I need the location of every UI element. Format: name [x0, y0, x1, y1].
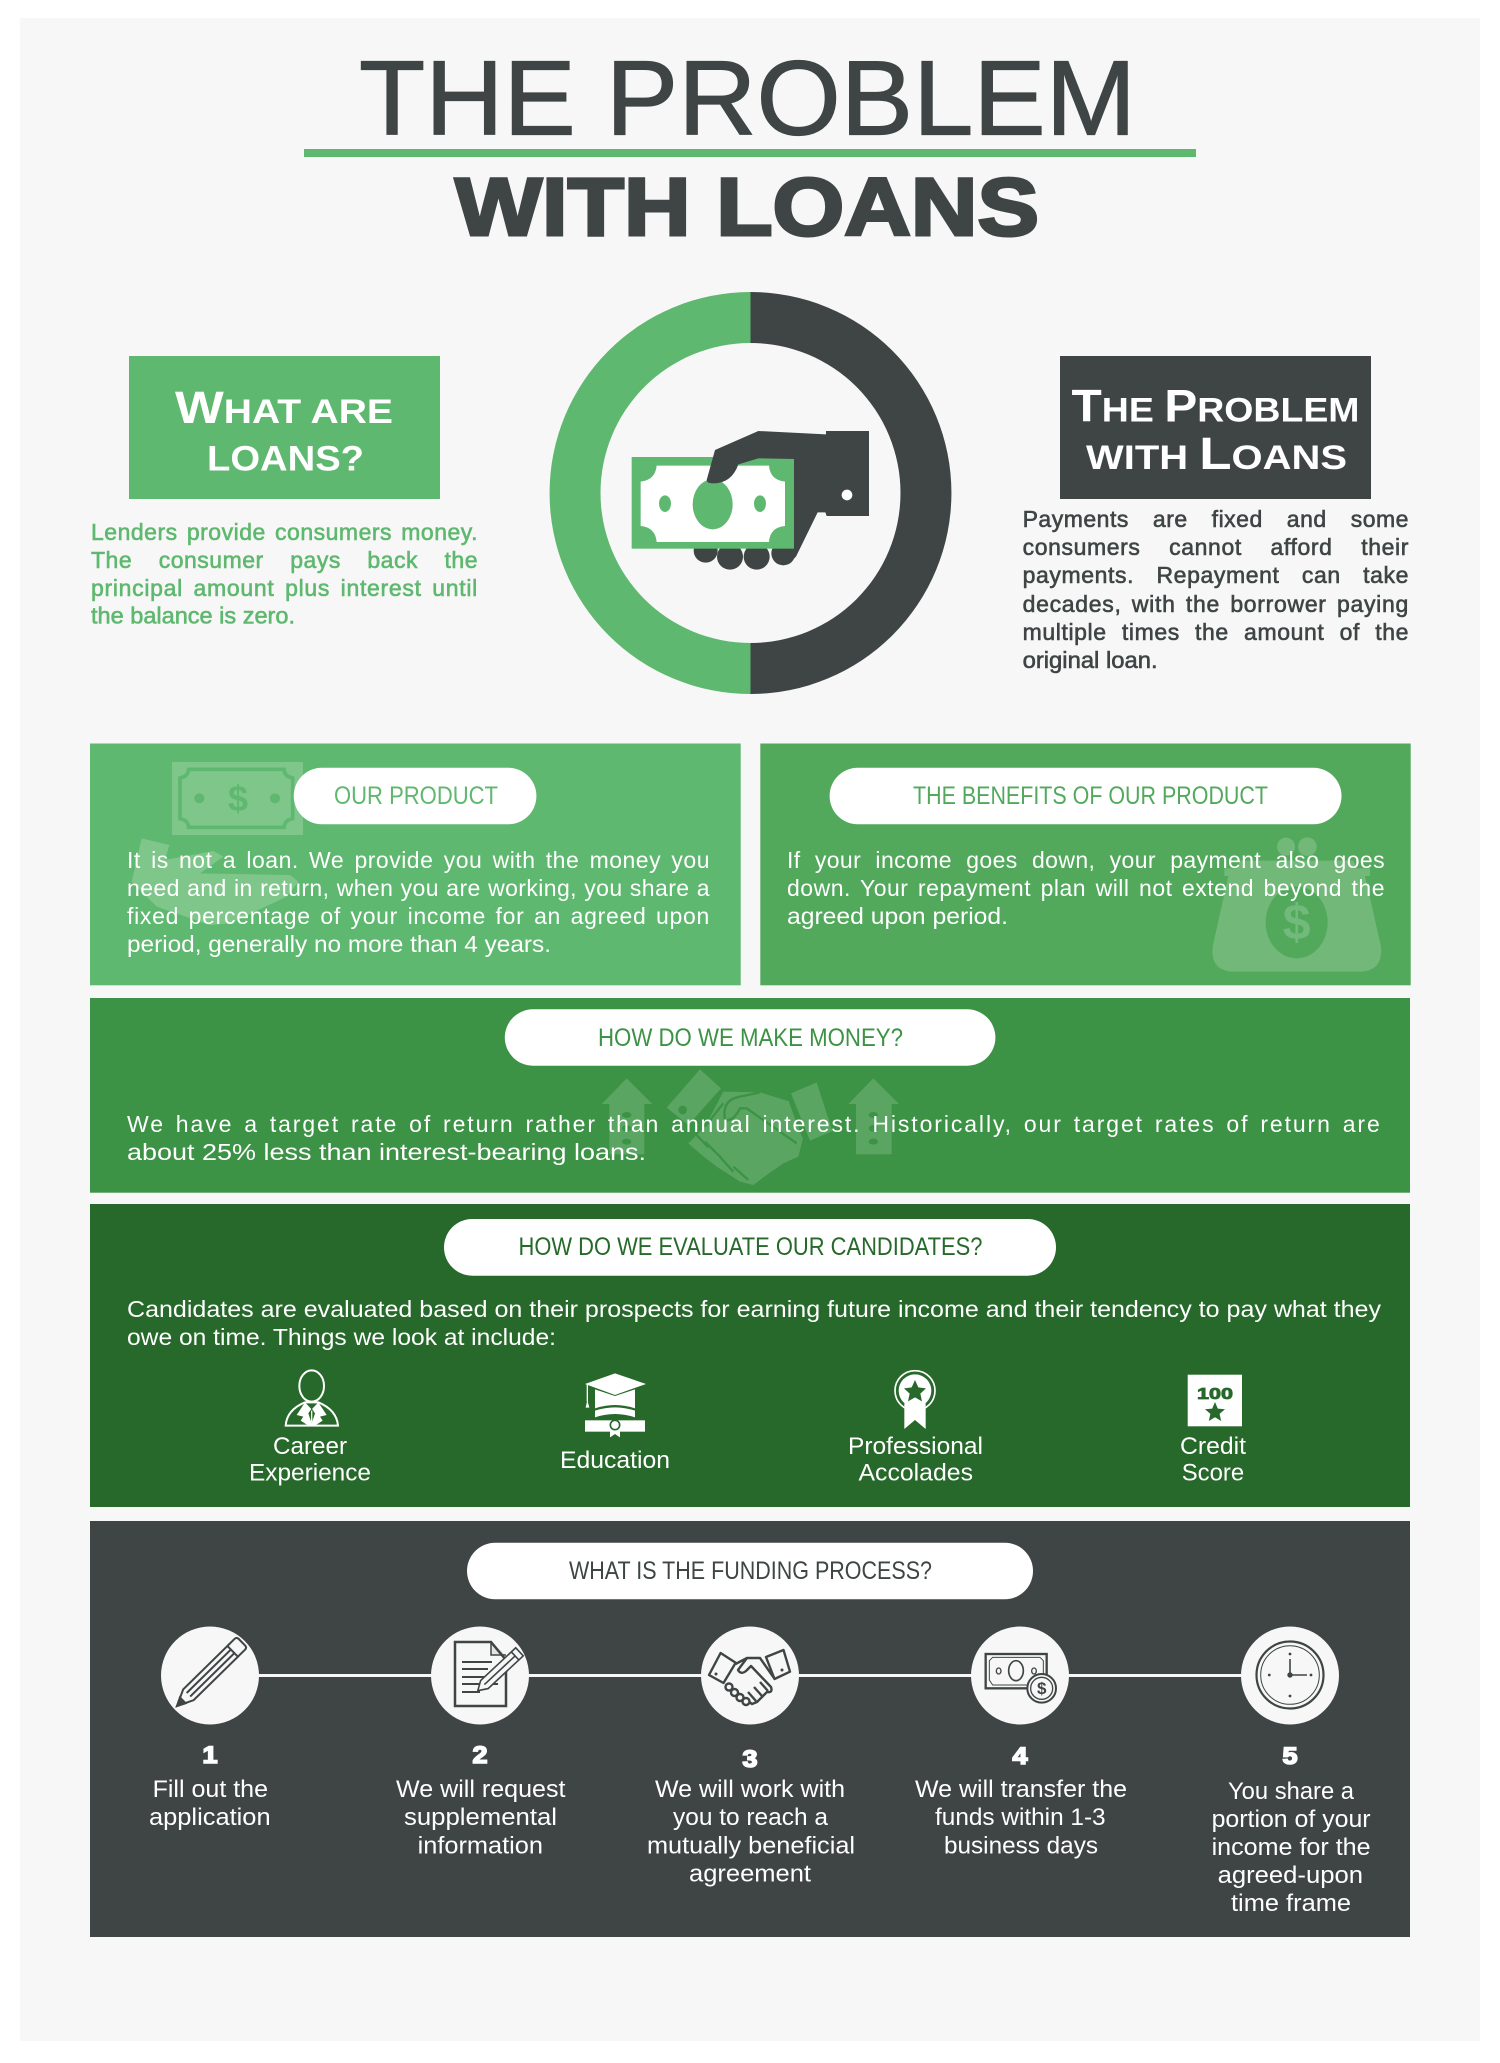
icon: credit score: 100 [1197, 1386, 1233, 1403]
heading box: what are loans: WHAT ARE [175, 382, 393, 433]
label: step 4 [915, 1776, 1127, 1860]
label: professional accolades: Professional [848, 1433, 983, 1460]
text: what are loans: principal amount plus interest until [91, 575, 478, 601]
panel: the benefits of our product [760, 744, 1411, 985]
pill: funding process [467, 1543, 1033, 1599]
heading box: the problem with loans [1060, 356, 1371, 499]
timeline connector [210, 1674, 1290, 1677]
icon: handshake [701, 1626, 799, 1724]
text: the problem with loans [1023, 505, 1423, 673]
text: benefits: If your income goes down, your payment also goes [787, 847, 1385, 873]
step 2 [396, 1626, 566, 1860]
label: step 5: time frame [1231, 1890, 1351, 1917]
label: step 5: You share a [1228, 1778, 1355, 1805]
text: the problem with loans: consumers cannot afford their [1023, 534, 1409, 560]
text: our product: fixed percentage of your income for an agreed upon [127, 903, 710, 929]
title line one: THE PROBLEM [359, 40, 1136, 158]
text: benefits: agreed upon period. [787, 903, 1008, 929]
label: step 2: supplemental [404, 1804, 557, 1831]
number 2: 2 [472, 1742, 488, 1769]
text: our product: need and in return, when you are working, you share a [127, 875, 710, 901]
pill: funding process: WHAT IS THE FUNDING PROCESS? [569, 1557, 932, 1585]
panel: how do we make money [90, 998, 1410, 1193]
watermark: hand [132, 838, 298, 925]
icon: credit score [1188, 1375, 1242, 1426]
watermark: money bag [1212, 837, 1381, 972]
watermark: banknote [172, 762, 303, 835]
text: what are loans: Lenders provide consumers money. [91, 518, 478, 544]
label: education: Education [560, 1447, 670, 1474]
text: the problem with loans: multiple times the amount of the [1023, 619, 1409, 645]
text: the problem with loans: original loan. [1023, 647, 1158, 673]
icon: hand holding banknote [632, 431, 869, 570]
label: step 2: We will request [396, 1776, 566, 1803]
text: make money [127, 1110, 1397, 1165]
label: credit score [1180, 1433, 1246, 1486]
donut ring [550, 292, 951, 694]
label: career experience [249, 1433, 371, 1486]
title underline [304, 149, 1196, 157]
label: step 5 [1212, 1778, 1371, 1917]
text: the problem with loans: Payments are fixed and some [1023, 506, 1409, 532]
text: our product: It is not a loan. We provide you with the money you [127, 847, 710, 873]
text: evaluate: Candidates are evaluated based on their prospects for earning future income and their tendency to pay what they [127, 1296, 1382, 1322]
pill: make money: HOW DO WE MAKE MONEY? [598, 1024, 903, 1052]
text: the problem with loans: decades, with the borrower paying [1023, 591, 1409, 617]
label: step 1 [149, 1776, 271, 1831]
text: make money: about 25% less than interest-bearing loans. [127, 1139, 646, 1165]
heading box: what are loans: LOANS? [207, 440, 364, 478]
heading box: the problem with loans: THE PROBLEM [1072, 380, 1360, 432]
icon: clock [1241, 1626, 1339, 1724]
heading box: what are loans [129, 356, 440, 499]
label: career experience: Career [273, 1433, 347, 1460]
watermark: handshake and arrows [602, 1069, 899, 1185]
label: professional accolades [848, 1433, 983, 1486]
text: evaluate: owe on time. Things we look at include: [127, 1324, 556, 1350]
pill: evaluate [444, 1219, 1056, 1276]
label: step 2 [396, 1776, 566, 1860]
label: professional accolades: Accolades [858, 1460, 973, 1486]
step 5 [1212, 1626, 1371, 1917]
text: our product: period, generally no more than 4 years. [127, 931, 551, 957]
label: credit score: Credit [1180, 1433, 1246, 1460]
pill: benefits [830, 768, 1342, 824]
icon: pencil [161, 1626, 259, 1724]
number 1: 1 [202, 1742, 218, 1769]
heading box: the problem with loans: WITH LOANS [1086, 428, 1347, 479]
pill: evaluate: HOW DO WE EVALUATE OUR CANDIDATES? [518, 1233, 982, 1261]
icon: education [585, 1373, 646, 1437]
number 3: 3 [742, 1746, 758, 1773]
title [304, 40, 1196, 253]
step 4 [915, 1626, 1127, 1860]
pill: our product: OUR PRODUCT [334, 782, 498, 810]
step 1 [149, 1626, 271, 1831]
pill: make money [505, 1009, 995, 1066]
label: credit score: Score [1182, 1460, 1244, 1486]
step 3 [647, 1626, 855, 1888]
text: what are loans [91, 518, 491, 628]
text: what are loans: The consumer pays back the [91, 547, 478, 573]
watermark: dollar sign: $ [228, 778, 248, 819]
panel: what is the funding process [90, 1521, 1410, 1937]
pill: benefits: THE BENEFITS OF OUR PRODUCT [913, 782, 1268, 810]
text: make money: We have a target rate of return rather than annual interest. Historically, our target rates of return are [127, 1111, 1382, 1137]
panel: our product [90, 744, 741, 985]
label: step 5: income for the [1212, 1834, 1371, 1861]
text: the problem with loans: payments. Repayment can take [1023, 562, 1409, 588]
panel: how do we evaluate our candidates [90, 1204, 1410, 1507]
text: our product [127, 846, 727, 957]
text: benefits [787, 846, 1397, 929]
label: step 4: We will transfer the [915, 1776, 1127, 1803]
label: career experience: Experience [249, 1460, 371, 1486]
label: step 3: agreement [689, 1860, 811, 1888]
label: step 1: Fill out the [153, 1776, 268, 1803]
label: step 5: agreed-upon [1218, 1862, 1363, 1889]
label: step 1: application [149, 1804, 271, 1831]
icon: money and coin: $ [1037, 1679, 1047, 1698]
label: step 3 [647, 1776, 855, 1888]
icon: money and coin [971, 1626, 1069, 1724]
text: what are loans: the balance is zero. [91, 602, 295, 628]
text: evaluate [127, 1296, 1382, 1350]
label: step 3: mutually beneficial [647, 1832, 855, 1860]
label: step 4: business days [944, 1832, 1098, 1860]
label: step 4: funds within 1-3 [935, 1804, 1106, 1831]
number 5: 5 [1282, 1743, 1298, 1770]
number 4: 4 [1012, 1743, 1028, 1770]
pill: our product [294, 768, 536, 824]
icon: document and pen [431, 1626, 529, 1724]
icon: career experience [286, 1370, 338, 1426]
label: step 3: you to reach a [673, 1804, 829, 1831]
text: benefits: down. Your repayment plan will not extend beyond the [787, 875, 1385, 901]
title line two: WITH LOANS [455, 162, 1039, 253]
label: step 3: We will work with [655, 1776, 845, 1803]
watermark: money bag: $ [1283, 894, 1311, 950]
label: step 5: portion of your [1212, 1806, 1371, 1833]
label: step 2: information [418, 1832, 543, 1860]
icon: professional accolades [895, 1371, 935, 1429]
